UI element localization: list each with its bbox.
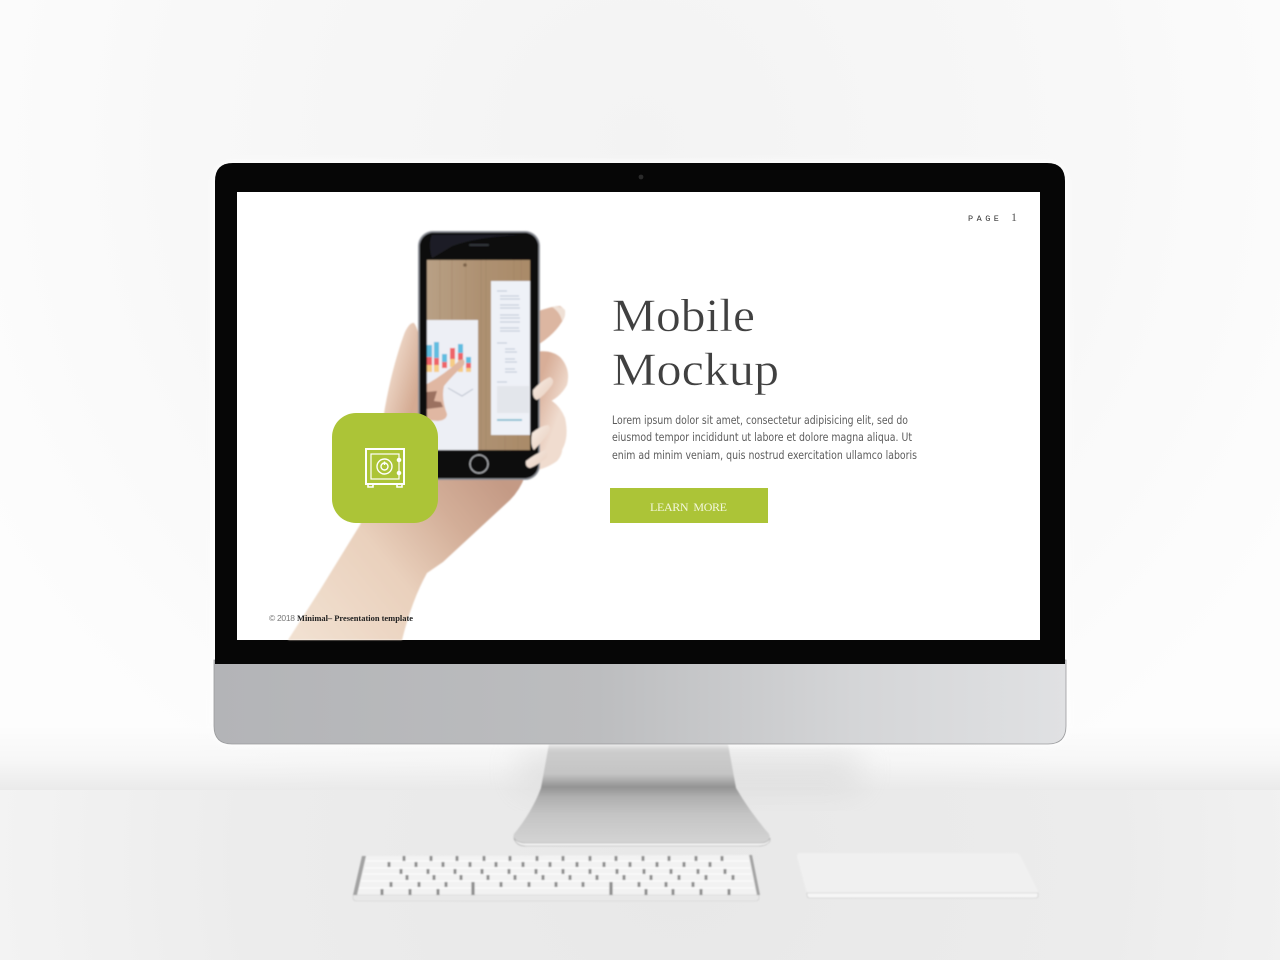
right paper <box>491 281 530 435</box>
body text: enim ad minim veniam, quis nostrud exercitation ullamco laboris <box>612 448 917 462</box>
key gaps <box>382 856 733 895</box>
left paper <box>427 320 478 450</box>
webcam <box>639 175 643 179</box>
thumb <box>383 323 422 440</box>
phone held in hand <box>288 231 568 640</box>
icon tile <box>332 413 438 523</box>
title <box>612 290 779 396</box>
middle finger <box>532 351 568 404</box>
wall shading near desk <box>0 725 1280 790</box>
fingertip <box>552 306 565 321</box>
pointing hand on screen <box>427 360 464 421</box>
shadow behind stand <box>520 750 860 788</box>
phone front <box>420 232 538 478</box>
trackpad top <box>797 853 1038 893</box>
body text <box>612 413 917 462</box>
phone screen wood <box>427 260 530 450</box>
keyboard right edge <box>749 855 760 895</box>
footer copyright: © 2018 <box>269 613 295 623</box>
phone body <box>418 231 540 480</box>
body text: Lorem ipsum dolor sit amet, consectetur adipisicing elit, sed do <box>612 413 908 427</box>
home button <box>470 455 488 473</box>
phone speaker <box>469 244 489 246</box>
monitor <box>212 161 1068 746</box>
ring finger nail <box>531 425 550 450</box>
bar chart <box>427 342 471 372</box>
knot in wood <box>463 263 467 267</box>
screen <box>237 192 1040 640</box>
learn more button <box>610 488 768 523</box>
title: Mockup <box>612 344 779 396</box>
keyboard body <box>353 855 759 895</box>
index finger <box>536 306 565 346</box>
page number <box>968 210 1017 224</box>
green rounded tile <box>332 413 438 523</box>
icon: safe <box>366 449 404 487</box>
title: Mobile <box>612 290 755 342</box>
ring finger <box>528 396 567 464</box>
trackpad front edge <box>807 893 1038 898</box>
middle finger nail <box>533 377 553 400</box>
right paper teal note <box>497 419 522 421</box>
page number: 1 <box>1011 210 1017 224</box>
body text: eiusmod tempor incididunt ut labore et dolore magna aliqua. Ut <box>612 430 912 444</box>
right paper text <box>497 291 520 382</box>
line chart on paper <box>448 388 473 396</box>
right paper grey band <box>497 386 529 413</box>
wood grain <box>440 260 521 450</box>
monitor stand <box>513 744 770 846</box>
phone glare <box>430 235 525 258</box>
monitor bezel <box>215 163 1065 664</box>
monitor chin <box>214 660 1066 744</box>
little finger <box>526 441 562 472</box>
finger shadow <box>427 391 443 409</box>
desk surface <box>0 790 1280 960</box>
learn more button: LEARN MORE <box>650 500 727 514</box>
page number: PAGE <box>968 214 1002 224</box>
keyboard <box>353 855 760 901</box>
little finger nail <box>526 450 547 468</box>
large key gaps <box>473 882 611 895</box>
keyboard left edge <box>353 856 366 895</box>
hand and wrist <box>288 400 525 640</box>
keyboard front edge <box>353 895 759 901</box>
monitor halo <box>212 161 1068 746</box>
trackpad <box>797 853 1038 898</box>
footer copyright: Minimal– Presentation template <box>297 613 413 623</box>
key row lines <box>359 861 754 888</box>
